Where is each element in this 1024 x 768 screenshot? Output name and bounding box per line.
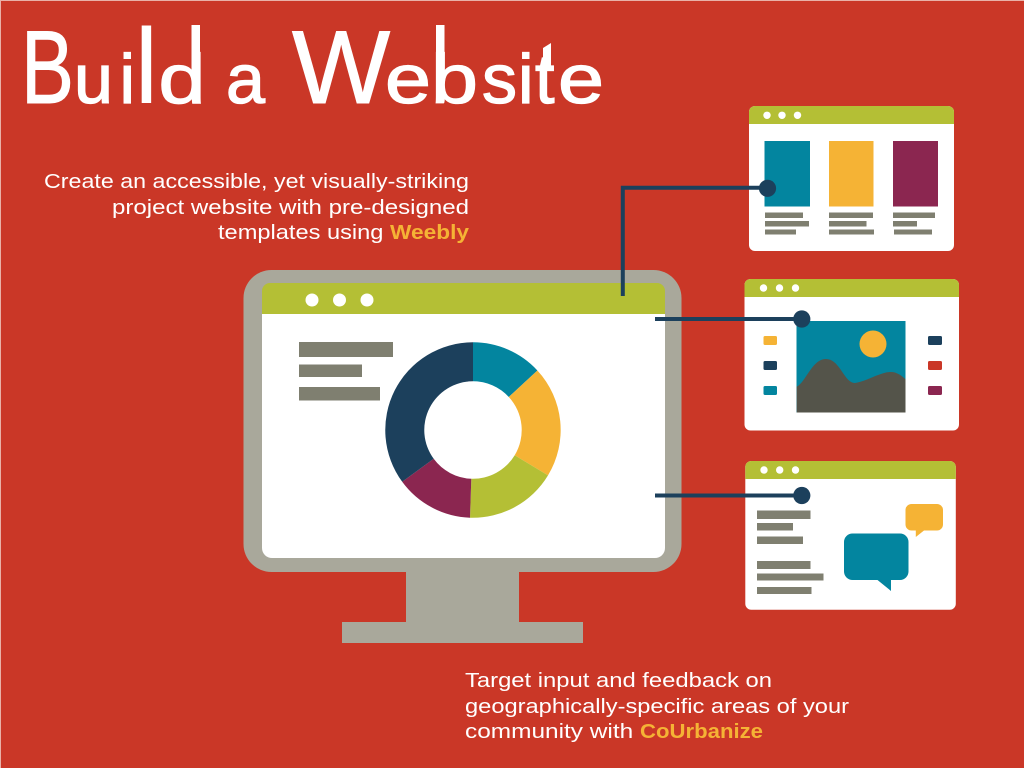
title: e xyxy=(558,40,604,118)
speech bubble: teal xyxy=(844,534,908,591)
title: l xyxy=(134,6,158,126)
title: d xyxy=(158,40,206,118)
monitor stand xyxy=(342,570,583,643)
monitor screen xyxy=(262,283,665,558)
connector: monitor to feedback window xyxy=(655,487,810,504)
speech bubble: orange xyxy=(906,504,943,537)
title: B xyxy=(21,10,74,126)
browser window: feedback layout xyxy=(745,461,956,610)
text block: CoUrbanize description: Target input and feedback on xyxy=(465,669,772,692)
title: u xyxy=(74,40,113,118)
title: i xyxy=(120,40,135,118)
title: i xyxy=(518,40,534,118)
browser window: three column layout xyxy=(749,106,954,251)
connector: monitor to three column window xyxy=(621,180,776,296)
text placeholder bars xyxy=(299,342,393,400)
title xyxy=(21,6,604,126)
donut chart xyxy=(385,342,561,518)
text block: CoUrbanize description: geographically-specific areas of your xyxy=(465,695,849,718)
text block: Weebly description: project website with pre-designed xyxy=(112,196,469,219)
browser dots xyxy=(306,294,374,306)
browser header bar xyxy=(262,283,665,314)
title: a xyxy=(226,40,265,118)
title: b xyxy=(431,40,478,118)
text block: CoUrbanize description xyxy=(465,669,849,743)
text block: Weebly description: templates using xyxy=(218,221,390,244)
title: s xyxy=(482,40,517,118)
text block: Weebly description xyxy=(44,170,470,244)
text block: Weebly description: Weebly xyxy=(390,221,470,244)
monitor frame xyxy=(244,270,682,572)
text block: Weebly description: Create an accessible, yet visually-striking xyxy=(44,170,469,193)
landscape picture xyxy=(796,321,906,412)
monitor xyxy=(244,270,682,643)
title: t xyxy=(535,40,554,118)
connector: monitor to image window xyxy=(655,310,810,328)
text block: CoUrbanize description: CoUrbanize xyxy=(640,720,763,743)
text block: CoUrbanize description: community with xyxy=(465,720,640,743)
title: W xyxy=(292,10,390,126)
title: e xyxy=(385,40,431,118)
browser window: image layout xyxy=(744,279,959,430)
